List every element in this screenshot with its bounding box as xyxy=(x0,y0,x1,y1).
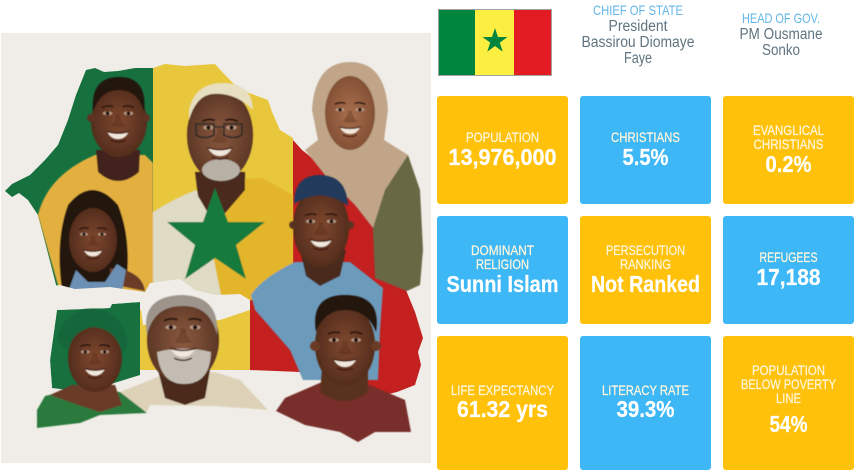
map: lower yellow fragment xyxy=(140,310,250,370)
stat card: literacy rate: LITERACY RATE xyxy=(602,382,689,398)
map: lower green fragment xyxy=(50,302,140,392)
person: elder with white beard xyxy=(113,295,268,412)
stat card: refugees: REFUGEES xyxy=(760,249,818,265)
person: young man in yellow tunic xyxy=(38,77,153,292)
person: woman in hijab xyxy=(305,62,423,291)
stat card: christians: 5.5% xyxy=(622,144,669,170)
stat card: persecution ranking: Not Ranked xyxy=(591,271,700,297)
person: man in cap and blue shirt xyxy=(251,175,383,380)
person: girl with braids xyxy=(60,190,145,292)
stat card: population: POPULATION xyxy=(466,129,539,145)
stat card: persecution ranking: RANKING xyxy=(620,256,671,272)
torn paper strip: lower left xyxy=(1,279,250,440)
chief of state: President xyxy=(608,18,668,35)
map: green stripe xyxy=(5,68,153,300)
stat card: population: 13,976,000 xyxy=(448,144,556,170)
icon: green flag star xyxy=(167,188,265,279)
flag of Senegal xyxy=(438,10,552,76)
people lower row xyxy=(37,295,411,442)
stat card: population below poverty line xyxy=(723,336,854,470)
person: elder with glasses xyxy=(153,83,293,300)
chief of state: Bassirou Diomaye xyxy=(582,34,694,51)
stat card: christians: CHRISTIANS xyxy=(611,129,680,145)
person: boy in maroon t-shirt xyxy=(276,295,411,442)
stat card: evangelical christians: CHRISTIANS xyxy=(754,136,824,152)
stat card: dominant religion: RELIGION xyxy=(476,256,529,272)
people xyxy=(38,62,423,380)
stat card: refugees: 17,188 xyxy=(756,264,820,290)
head of government xyxy=(740,10,822,59)
stat card: dominant religion xyxy=(437,216,568,324)
stat card: persecution ranking xyxy=(580,216,711,324)
head of government: HEAD OF GOV. xyxy=(742,10,820,26)
stat card: evangelical christians: EVANGLICAL xyxy=(753,122,824,138)
stat card: dominant religion: DOMINANT xyxy=(471,242,534,258)
person: woman with green headwrap xyxy=(37,309,147,428)
chief of state: CHIEF OF STATE xyxy=(593,2,683,18)
head of government: PM Ousmane xyxy=(740,26,822,43)
stat card: refugees xyxy=(723,216,854,324)
stat card: life expectancy: 61.32 yrs xyxy=(457,396,548,422)
stat card: christians xyxy=(580,96,711,204)
map: yellow stripe xyxy=(153,64,293,300)
map: red stripe xyxy=(250,140,423,396)
stat card: life expectancy: LIFE EXPECTANCY xyxy=(451,382,555,398)
stat card: dominant religion: Sunni Islam xyxy=(446,271,558,297)
stat card: evangelical christians: 0.2% xyxy=(766,151,812,177)
stat card: population below poverty line: LINE xyxy=(776,390,801,406)
stat card: persecution ranking: PERSECUTION xyxy=(606,242,685,258)
head of government: Sonko xyxy=(762,42,800,59)
stat card: evangelical christians xyxy=(723,96,854,204)
stat card: literacy rate: 39.3% xyxy=(616,396,675,422)
stat card: population below poverty line: POPULATION xyxy=(752,362,825,378)
stat card: population xyxy=(437,96,568,204)
chief of state: Faye xyxy=(624,50,652,67)
stat card: literacy rate xyxy=(580,336,711,470)
chief of state xyxy=(582,2,694,67)
panel: Senegal people map illustration xyxy=(1,33,431,463)
stat card: life expectancy xyxy=(437,336,568,470)
stat card: population below poverty line: 54% xyxy=(770,411,808,437)
